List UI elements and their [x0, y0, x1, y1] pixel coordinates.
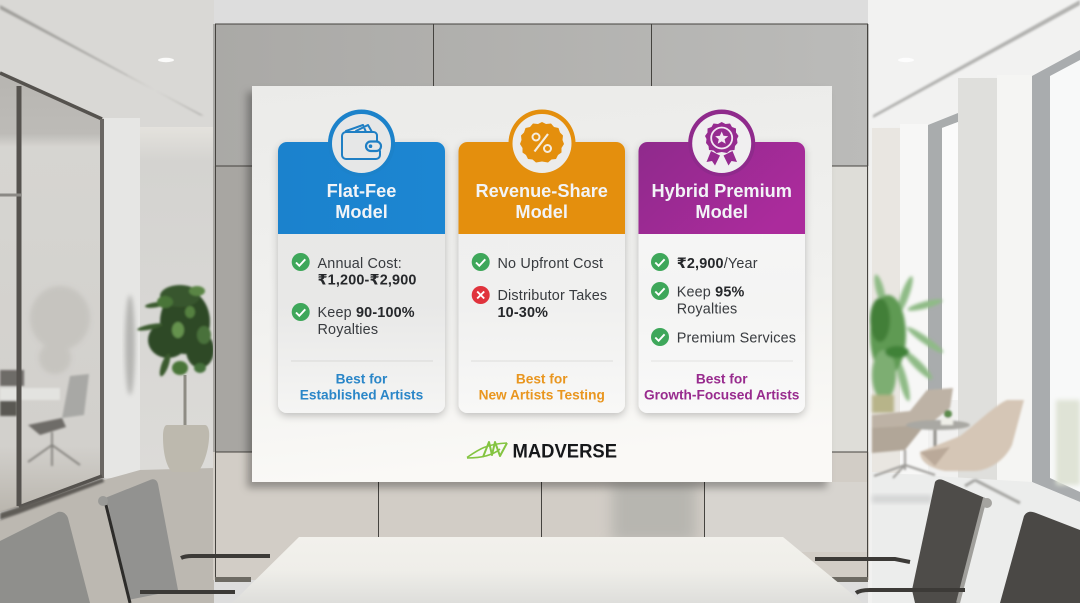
heading: Model [335, 202, 388, 222]
heading: Flat-Fee [327, 181, 396, 201]
icon: award rosette [688, 110, 755, 176]
best for label: Best for [336, 372, 388, 386]
icon: percent badge [508, 110, 576, 176]
logo mark [467, 442, 507, 458]
heading [651, 181, 792, 222]
best for label: New Artists Testing [479, 388, 605, 402]
icon: wallet [328, 110, 395, 176]
glass partition [0, 72, 103, 512]
dark chairs, right [815, 479, 1080, 603]
heading: Model [695, 202, 748, 222]
side wall and column [104, 118, 140, 478]
background: right office area [868, 0, 1080, 603]
left potted plant [137, 285, 214, 472]
floor [0, 468, 214, 603]
right column [958, 78, 998, 483]
background: left office area [0, 0, 214, 603]
item: price per year [651, 253, 758, 272]
best for label [644, 372, 800, 402]
item: annual cost: ₹1,200-₹2,900 [318, 272, 417, 288]
item: royalties: Keep 90-100% [318, 305, 415, 321]
left ceiling [0, 0, 214, 127]
back wall and small window [872, 128, 902, 473]
wall panel behind the board [213, 24, 869, 582]
heading [327, 181, 396, 222]
item: keep royalties [651, 282, 745, 318]
beige lounge chairs and side table [872, 388, 1024, 503]
card header [458, 142, 625, 234]
card header [278, 142, 445, 234]
panel: Hybrid Premium model [638, 110, 805, 413]
large window [1032, 50, 1080, 502]
best for label: Best for [696, 372, 748, 386]
glass frames [0, 73, 102, 507]
panel: Flat-Fee model [278, 110, 445, 413]
heading [475, 181, 608, 222]
right ceiling [868, 0, 1080, 128]
grey chairs, left [0, 479, 270, 603]
item: annual cost [292, 253, 417, 288]
item: keep royalties: Keep 95% [677, 284, 745, 300]
presentation board [252, 86, 832, 482]
heading: Hybrid Premium [651, 181, 792, 201]
item: royalties [292, 303, 415, 338]
item: annual cost: Annual Cost: [318, 256, 402, 272]
best for label [479, 372, 605, 402]
item: distributor takes: Distributor Takes [498, 288, 607, 304]
best for label: Established Artists [300, 388, 424, 402]
card header [638, 142, 805, 234]
heading: Model [515, 202, 568, 222]
item: premium services: Premium Services [677, 330, 796, 346]
conference table [232, 537, 863, 603]
floor [872, 472, 1080, 603]
recessed ceiling light [158, 58, 174, 62]
heading: Revenue-Share [475, 181, 608, 201]
recessed ceiling light [898, 58, 914, 62]
item: no upfront cost: No Upfront Cost [498, 256, 603, 272]
card body [638, 142, 805, 413]
item: no upfront cost [472, 253, 603, 272]
reflected room chair and table [0, 370, 89, 466]
item: distributor takes [472, 286, 607, 321]
card body [458, 142, 625, 413]
best for label [300, 372, 424, 402]
panel: Revenue-Share model [458, 110, 625, 413]
best for label: Best for [516, 372, 568, 386]
item: keep royalties: Royalties [677, 302, 737, 318]
right plant [870, 274, 945, 413]
best for label: Growth-Focused Artists [644, 388, 800, 402]
card body [278, 142, 445, 413]
item: price per year: ₹2,900/Year [677, 256, 758, 272]
logo: Madverse: MADVERSE [512, 440, 617, 462]
item: royalties: Royalties [318, 322, 378, 338]
logo: Madverse [467, 440, 617, 462]
item: distributor takes: 10-30% [498, 305, 548, 321]
